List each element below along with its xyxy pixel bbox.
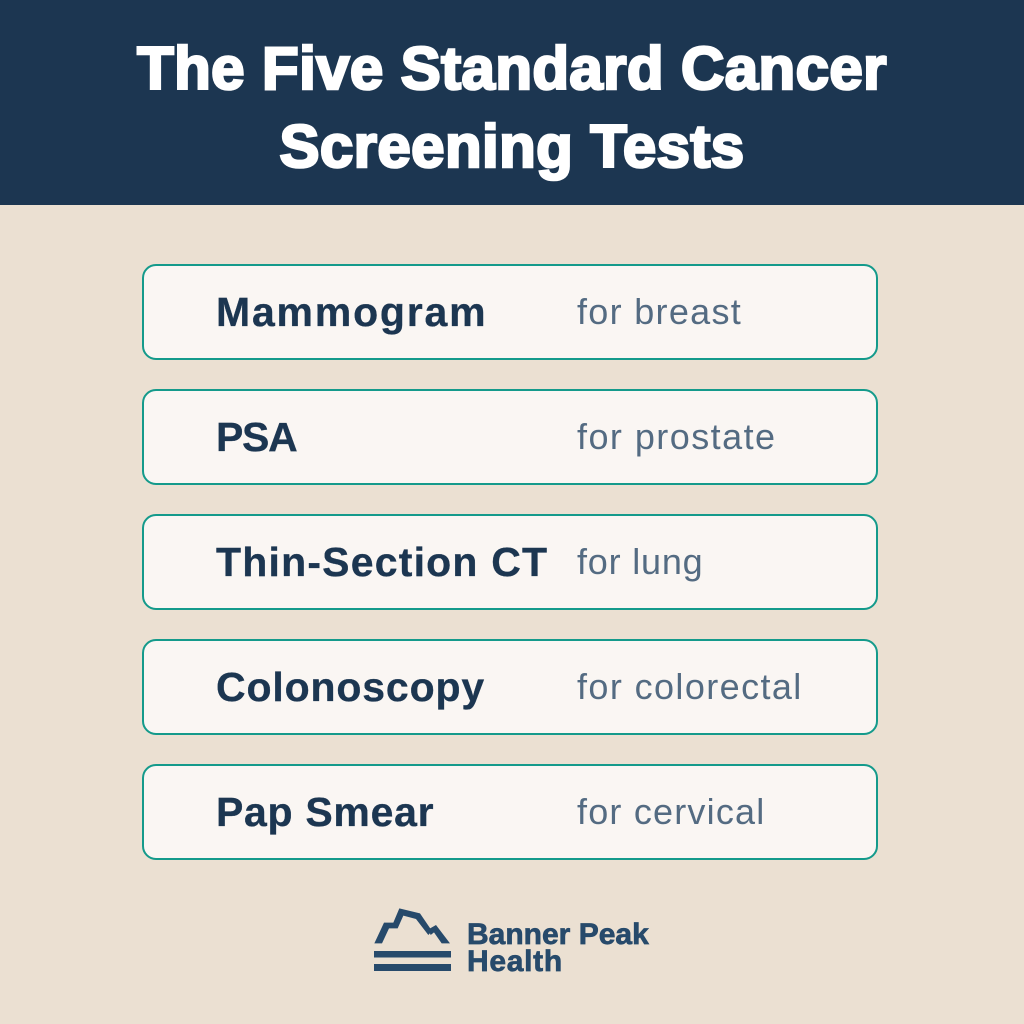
title: The Five Standard Cancer: [137, 35, 887, 102]
row: Colonoscopy card: [142, 639, 878, 735]
cancer type: colorectal: for colorectal: [577, 666, 803, 707]
title: [136, 35, 887, 182]
test name: PSA: PSA: [216, 414, 296, 460]
test name: Colonoscopy: Colonoscopy: [216, 664, 485, 710]
cancer type: prostate: for prostate: [577, 416, 776, 457]
logo wordmark: Banner Peak: [467, 918, 649, 951]
test name: Thin-Section CT: Thin-Section CT: [216, 539, 548, 585]
row: PSA card: [142, 389, 878, 485]
cancer type: breast: for breast: [577, 291, 742, 332]
logo wordmark: [467, 918, 650, 978]
logo wordmark: Health: [467, 945, 563, 978]
title: Screening Tests: [279, 113, 745, 180]
cancer type: lung: for lung: [577, 541, 703, 582]
header band: [0, 0, 1024, 205]
row: Pap Smear card: [142, 764, 878, 860]
cancer type: cervical: for cervical: [577, 791, 765, 832]
test name: Mammogram: Mammogram: [216, 289, 487, 335]
test name: Pap Smear: Pap Smear: [216, 789, 434, 835]
icon: mountain logo: [374, 908, 451, 971]
row: Thin-Section CT card: [142, 514, 878, 610]
row: Mammogram card: [142, 264, 878, 360]
